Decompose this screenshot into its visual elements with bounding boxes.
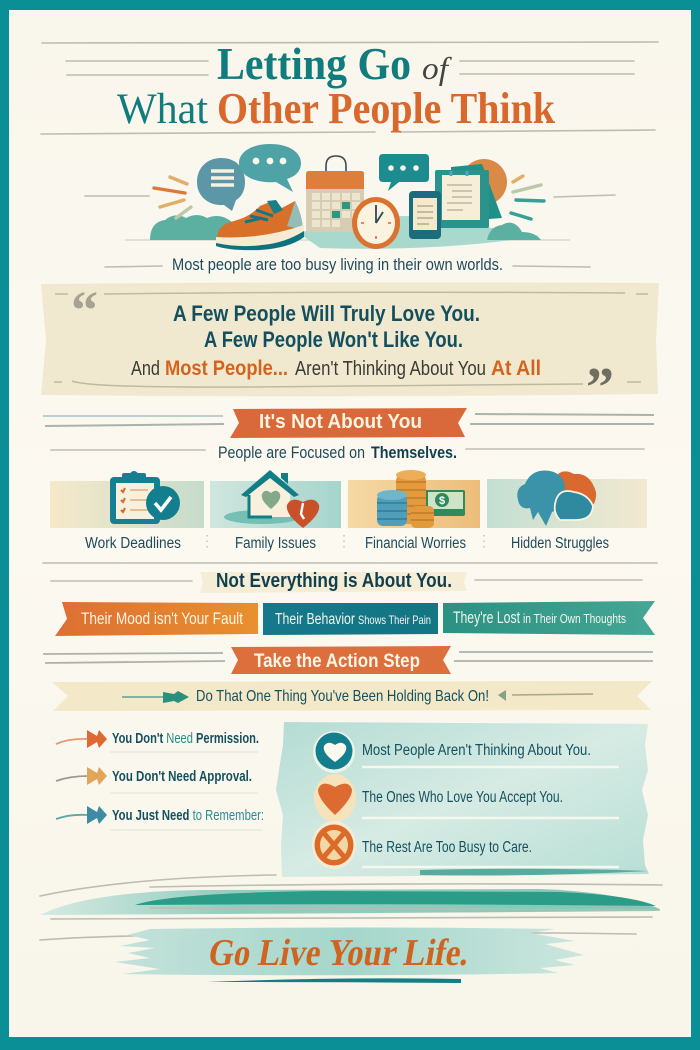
icon: house and broken heart xyxy=(241,470,319,528)
title: Letting Go xyxy=(217,38,411,89)
ribbon: behavior xyxy=(263,603,438,635)
list: don't need xyxy=(56,730,264,830)
item 2: You Don't Need Approval. xyxy=(112,768,252,785)
ribbon: mood: Their Mood isn't Your Fault xyxy=(81,610,243,628)
phone xyxy=(409,191,441,239)
action banner: Do That One Thing You've Been Holding Back On! xyxy=(196,688,489,705)
item: orange heart badge: The Ones Who Love You Accept You. xyxy=(362,789,563,806)
subheading: focused on themselves: People are Focused on xyxy=(218,444,365,462)
bushes xyxy=(150,215,541,240)
sparks xyxy=(154,188,185,193)
panel: remember xyxy=(276,722,649,877)
card: financial worries xyxy=(348,470,480,552)
ribbon: thoughts: in Their Own Thoughts xyxy=(523,611,626,626)
arrow right xyxy=(122,691,189,703)
quote text: Most People... xyxy=(165,357,288,380)
quote text xyxy=(131,301,541,380)
quote text: And xyxy=(131,358,160,380)
brush divider xyxy=(40,875,662,919)
item: cross badge xyxy=(312,821,532,869)
heading: Take the Action Step xyxy=(43,646,653,674)
item: heart badge: Most People Aren't Thinking About You. xyxy=(362,742,591,759)
closing message xyxy=(40,928,636,983)
ground wash xyxy=(300,216,540,249)
title: What xyxy=(117,86,208,133)
ribbon: thoughts: They're Lost xyxy=(453,608,520,627)
item 1: You Don't Need Permission. xyxy=(112,730,259,747)
heading: Not Everything is About You: Not Everything is About You. xyxy=(216,570,452,592)
card: work deadlines xyxy=(50,471,204,552)
quote text: At All xyxy=(491,357,541,380)
calendar xyxy=(326,156,346,172)
heading: It's Not About You xyxy=(43,408,654,438)
title xyxy=(41,38,658,134)
title: of xyxy=(422,50,452,86)
quote text: A Few People Will Truly Love You. xyxy=(173,301,480,326)
heading: It's Not About You: It's Not About You xyxy=(259,411,422,433)
icon: clipboard xyxy=(110,471,180,524)
hero illustration xyxy=(85,144,615,250)
ribbon: behavior: Shows Their Pain xyxy=(358,613,431,627)
item 2 xyxy=(56,767,252,785)
subheading: focused on themselves: Themselves. xyxy=(371,444,457,462)
item: cross badge: The Rest Are Too Busy to Care. xyxy=(362,839,532,856)
item: heart badge xyxy=(313,731,591,773)
orange circle and book xyxy=(461,159,507,205)
subtitle: Most people are too busy living in their own worlds. xyxy=(172,256,503,274)
closing message: Go Live Your Life. xyxy=(205,932,473,974)
quote mark close: ” xyxy=(586,357,614,419)
icon: coins and cash: $ xyxy=(439,495,445,507)
item 3: You Just Need to Remember: xyxy=(112,807,264,824)
panel: quote xyxy=(41,280,659,419)
item 1 xyxy=(56,730,259,748)
quote text: A Few People Won't Like You. xyxy=(204,327,463,352)
label: Hidden Struggles xyxy=(511,535,609,552)
chat square xyxy=(379,154,429,191)
subheading: focused on themselves xyxy=(51,444,644,462)
item 3 xyxy=(56,806,264,824)
ribbon: mood xyxy=(55,602,258,636)
ribbon: behavior: Their Behavior xyxy=(275,611,355,628)
card: hidden struggles xyxy=(487,471,647,552)
clock xyxy=(352,197,400,249)
label: Work Deadlines xyxy=(85,535,181,552)
heading: Take the Action Step: Take the Action Step xyxy=(254,651,420,672)
title: Other People Think xyxy=(217,84,555,133)
label: Financial Worries xyxy=(365,535,466,552)
heading: Not Everything is About You xyxy=(51,570,642,593)
quote mark open: “ xyxy=(71,280,98,340)
label: Family Issues xyxy=(235,535,316,552)
ribbon: thoughts xyxy=(443,601,655,635)
shoe xyxy=(217,201,303,241)
quote text: Aren't Thinking About You xyxy=(295,358,486,380)
icon: storm clouds xyxy=(517,471,596,526)
speech bubbles xyxy=(197,158,245,211)
card: family issues xyxy=(210,470,341,552)
action banner xyxy=(52,681,652,711)
item: orange heart badge xyxy=(314,774,563,822)
tablet and notepad xyxy=(435,170,489,228)
arrow left xyxy=(498,690,593,701)
